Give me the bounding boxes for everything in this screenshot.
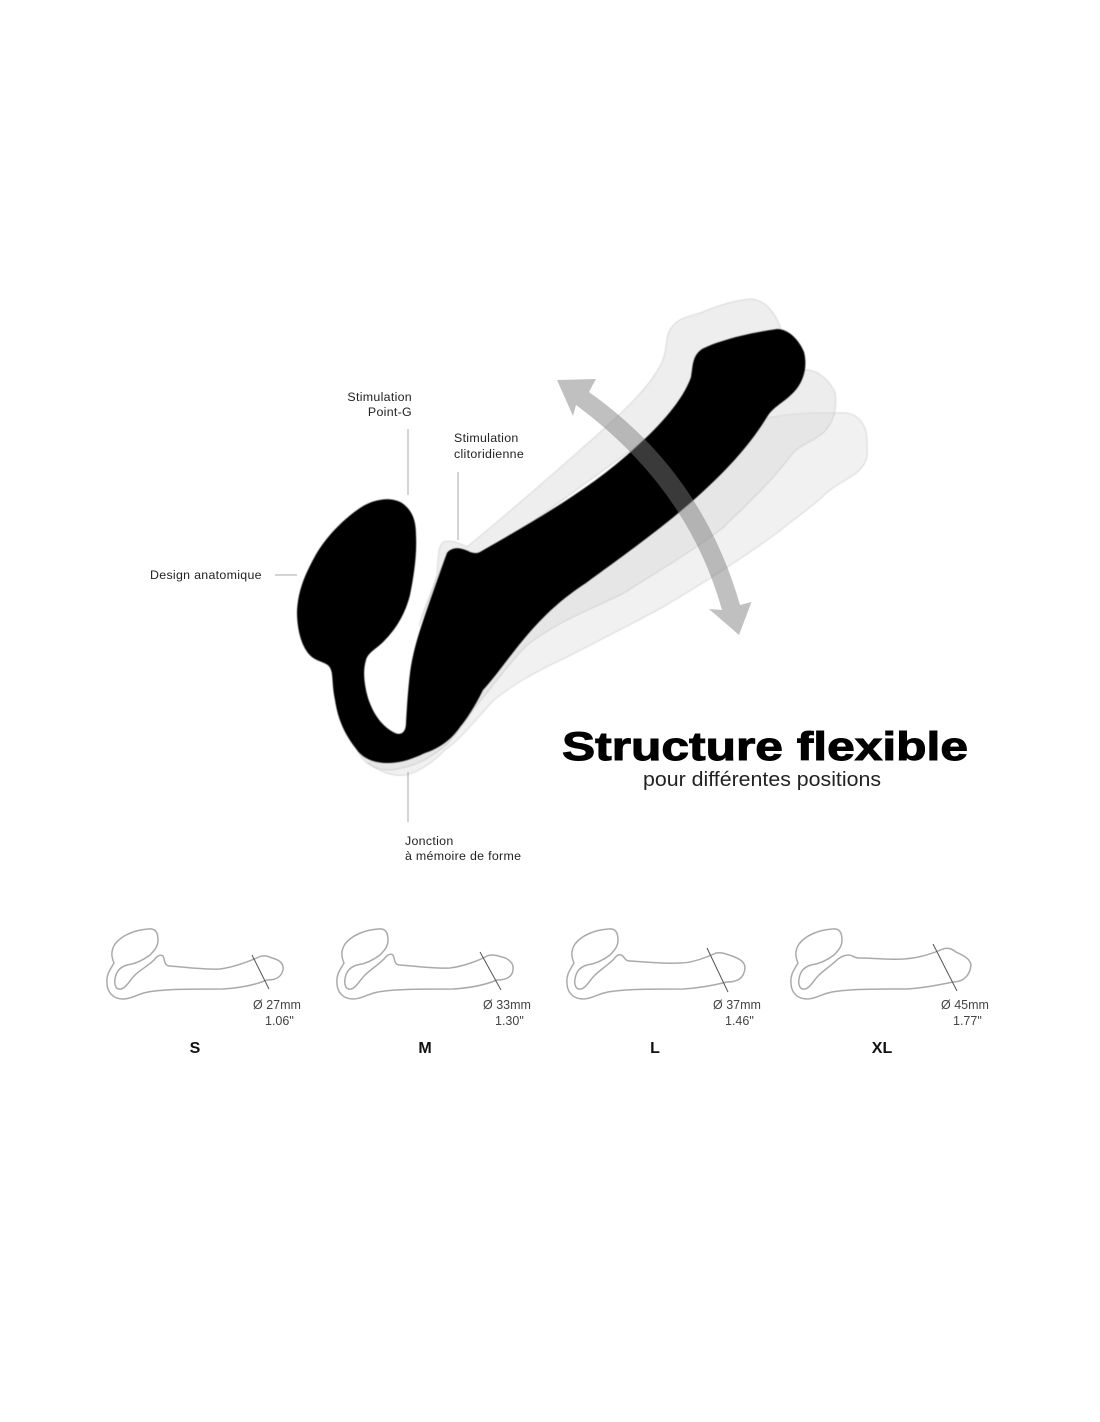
callout: Stimulation Point-G: Stimulation (347, 390, 412, 404)
size XL: XL (872, 1040, 892, 1057)
size XL: 1.77" (953, 1014, 982, 1028)
callout: Design anatomique: Design anatomique (150, 568, 262, 582)
title: Structure flexible (562, 725, 968, 769)
arrow: flexion range (557, 379, 752, 635)
size XL (791, 929, 989, 1057)
product diagram (297, 299, 867, 775)
size S: 1.06" (265, 1014, 294, 1028)
size L: Ø 37mm (713, 998, 761, 1012)
callout: Stimulation Point-G: Point-G (368, 405, 412, 419)
callout: Stimulation Point-G (347, 390, 412, 495)
size M: M (418, 1040, 432, 1057)
callout: Stimulation clitoridienne: Stimulation (454, 431, 519, 445)
ghost position: lowest (368, 413, 867, 775)
callout: Stimulation clitoridienne (454, 431, 524, 540)
ghost position: middle (357, 369, 836, 770)
size S (107, 929, 301, 1057)
size L: 1.46" (725, 1014, 754, 1028)
callout: Stimulation clitoridienne: clitoridienne (454, 447, 524, 461)
size L: L (650, 1040, 660, 1057)
size M (337, 929, 531, 1057)
subtitle: pour différentes positions (643, 768, 881, 791)
size S: S (190, 1040, 201, 1057)
size S: Ø 27mm (253, 998, 301, 1012)
callout: Jonction: Jonction (405, 834, 454, 848)
size M: Ø 33mm (483, 998, 531, 1012)
size M: 1.30" (495, 1014, 524, 1028)
size XL: Ø 45mm (941, 998, 989, 1012)
callout: Jonction (405, 772, 521, 863)
black silhouette (297, 329, 805, 763)
callout: Jonction: à mémoire de forme (405, 849, 521, 863)
ghost position: raised (419, 299, 781, 626)
size L (567, 929, 761, 1057)
